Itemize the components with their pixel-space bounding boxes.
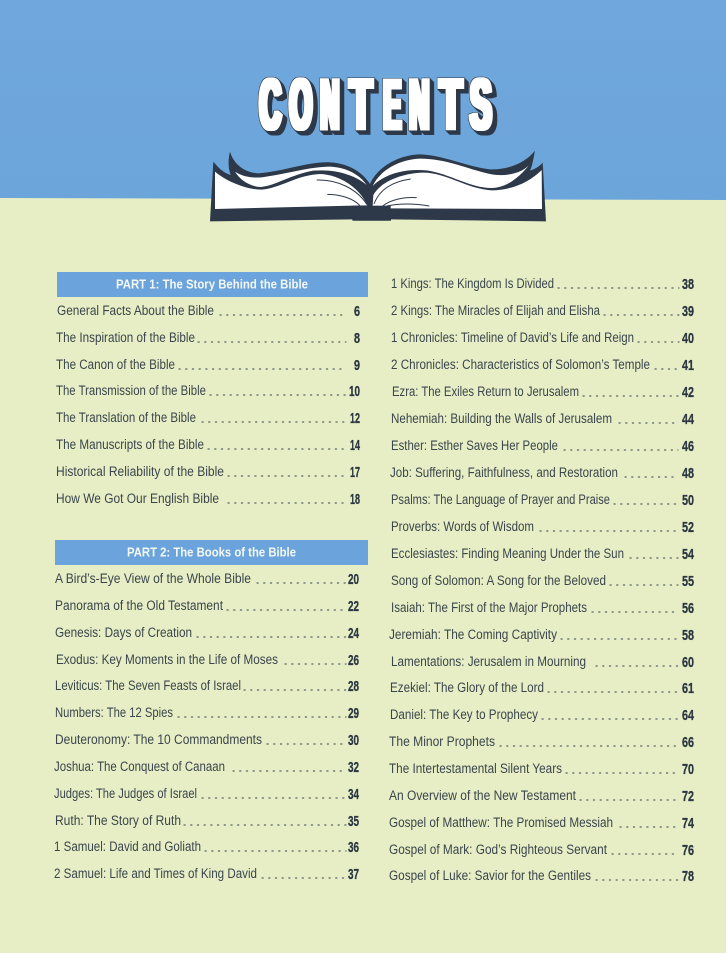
entry: new testament overview: An Overview of the New Testament: [389, 788, 576, 803]
title: N: [320, 66, 339, 145]
entry: intertestamental: The Intertestamental Silent Years: [389, 761, 562, 776]
entry: lamentations: [391, 654, 694, 671]
entry: leviticus: 28: [348, 678, 359, 695]
title: T: [440, 66, 462, 145]
entry: ruth: 35: [348, 813, 359, 830]
entry: esther: Esther: Esther Saves Her People: [391, 438, 558, 453]
entry: exodus: Exodus: Key Moments in the Life of Moses: [56, 652, 278, 667]
entry: song of solomon: 55: [682, 573, 694, 590]
entry: deuteronomy: [55, 732, 359, 749]
entry: inspiration: 8: [354, 330, 360, 347]
entry: ruth: Ruth: The Story of Ruth: [55, 813, 181, 828]
entry: 2 chronicles: 41: [682, 357, 694, 374]
entry: joshua: Joshua: The Conquest of Canaan: [54, 759, 225, 774]
entry: matthew: Gospel of Matthew: The Promised Messiah: [389, 815, 613, 830]
entry: proverbs: [391, 519, 694, 536]
icon: open book: [210, 151, 546, 221]
panel: part 2 heading: [55, 540, 368, 565]
entry: numbers: 29: [348, 705, 359, 722]
entry: ezekiel: Ezekiel: The Glory of the Lord: [390, 680, 544, 695]
entry: 2 chronicles: 2 Chronicles: Characteristics of Solomon’s Temple: [391, 357, 650, 372]
entry: canon: [56, 357, 360, 374]
entry: ezekiel: 61: [682, 680, 694, 697]
entry: daniel: 64: [682, 707, 694, 724]
entry: jeremiah: [389, 627, 694, 644]
panel: part 2 heading: PART 2: The Books of the Bible: [127, 546, 296, 560]
entry: minor prophets: [389, 734, 694, 751]
entry: deuteronomy: Deuteronomy: The 10 Commandments: [55, 732, 262, 747]
entry: historical reliability: [56, 464, 360, 481]
entry: 1 chronicles: 1 Chronicles: Timeline of David’s Life and Reign: [391, 330, 634, 345]
entry: judges: Judges: The Judges of Israel: [54, 786, 197, 801]
entry: english bible: [56, 491, 360, 508]
part 2 entries: [54, 571, 359, 883]
entry: new testament overview: 72: [682, 788, 694, 805]
entry: historical reliability: 17: [350, 464, 360, 481]
entry: 1 samuel: [54, 839, 359, 856]
entry: transmission: 10: [349, 383, 360, 400]
entry: minor prophets: 66: [682, 734, 694, 751]
entry: genesis: [55, 625, 359, 642]
panel: part 1 heading: [57, 272, 368, 297]
panel: part 1 heading: PART 1: The Story Behind the Bible: [116, 278, 308, 292]
entry: isaiah: [391, 600, 694, 617]
entry: bird's-eye view: [55, 571, 359, 588]
entry: judges: 34: [348, 786, 359, 803]
entry: general facts: General Facts About the Bible: [57, 303, 214, 318]
entry: ezra: 42: [682, 384, 694, 401]
entry: bird's-eye view: A Bird’s-Eye View of the Whole Bible: [55, 571, 251, 586]
entry: jeremiah: Jeremiah: The Coming Captivity: [389, 627, 557, 642]
entry: new testament overview: [389, 788, 694, 805]
entry: translation: [56, 410, 360, 427]
entry: proverbs: Proverbs: Words of Wisdom: [391, 519, 534, 534]
entry: judges: [54, 786, 359, 803]
entry: 1 kings: 38: [682, 276, 694, 293]
entry: nehemiah: Nehemiah: Building the Walls of Jerusalem: [391, 411, 612, 426]
entry: genesis: Genesis: Days of Creation: [55, 625, 192, 640]
entry: canon: The Canon of the Bible: [56, 357, 175, 372]
entry: manuscripts: [56, 437, 360, 454]
entry: jeremiah: 58: [682, 627, 694, 644]
entry: proverbs: 52: [682, 519, 694, 536]
entry: exodus: 26: [348, 652, 359, 669]
entry: luke: [389, 868, 694, 885]
entry: job: 48: [682, 465, 694, 482]
entry: inspiration: [56, 330, 360, 347]
entry: esther: 46: [682, 438, 694, 455]
entry: translation: 12: [350, 410, 360, 427]
entry: job: Job: Suffering, Faithfulness, and Restoration: [390, 465, 618, 480]
entry: transmission: [56, 383, 360, 400]
entry: 1 samuel: 1 Samuel: David and Goliath: [54, 839, 201, 854]
entry: panorama: Panorama of the Old Testament: [55, 598, 223, 613]
entry: general facts: 6: [354, 303, 360, 320]
entry: 2 samuel: 37: [348, 866, 359, 883]
entry: 2 samuel: [54, 866, 359, 883]
entry: general facts: [57, 303, 360, 320]
entry: mark: 76: [682, 842, 694, 859]
entry: 1 kings: [391, 276, 694, 293]
entry: ezekiel: [390, 680, 694, 697]
entry: transmission: The Transmission of the Bible: [56, 383, 206, 398]
entry: matthew: 74: [682, 815, 694, 832]
entry: psalms: Psalms: The Language of Prayer and Praise: [391, 492, 610, 507]
entry: daniel: Daniel: The Key to Prophecy: [390, 707, 538, 722]
entry: ecclesiastes: Ecclesiastes: Finding Meaning Under the Sun: [391, 546, 624, 561]
entry: 2 samuel: 2 Samuel: Life and Times of King David: [54, 866, 257, 881]
entry: 2 kings: 2 Kings: The Miracles of Elijah and Elisha: [391, 303, 600, 318]
entry: lamentations: 60: [682, 654, 694, 671]
title: E: [384, 66, 401, 145]
blue header band: [0, 0, 726, 200]
entry: 1 chronicles: 40: [682, 330, 694, 347]
entry: joshua: 32: [348, 759, 359, 776]
entry: canon: 9: [354, 357, 360, 374]
entry: leviticus: Leviticus: The Seven Feasts of Israel: [55, 678, 241, 693]
entry: 1 kings: 1 Kings: The Kingdom Is Divided: [391, 276, 554, 291]
right column entries: [389, 276, 694, 885]
entry: panorama: [55, 598, 359, 615]
entry: historical reliability: Historical Reliability of the Bible: [56, 464, 224, 479]
entry: daniel: [390, 707, 694, 724]
entry: intertestamental: [389, 761, 694, 778]
title: N: [410, 66, 429, 145]
entry: luke: Gospel of Luke: Savior for the Gentiles: [389, 868, 591, 883]
entry: numbers: [55, 705, 359, 722]
entry: ezra: [392, 384, 694, 401]
entry: inspiration: The Inspiration of the Bible: [56, 330, 195, 345]
entry: deuteronomy: 30: [348, 732, 359, 749]
entry: intertestamental: 70: [682, 761, 694, 778]
entry: luke: 78: [682, 868, 694, 885]
entry: english bible: How We Got Our English Bible: [56, 491, 219, 506]
entry: mark: Gospel of Mark: God’s Righteous Servant: [389, 842, 607, 857]
part 1 entries: [56, 303, 360, 508]
entry: ezra: Ezra: The Exiles Return to Jerusalem: [392, 384, 579, 399]
entry: ruth: [55, 813, 359, 830]
title: C: [260, 66, 281, 145]
entry: isaiah: 56: [682, 600, 694, 617]
entry: english bible: 18: [350, 491, 360, 508]
entry: nehemiah: 44: [682, 411, 694, 428]
entry: translation: The Translation of the Bible: [56, 410, 196, 425]
entry: joshua: [54, 759, 359, 776]
entry: bird's-eye view: 20: [348, 571, 359, 588]
entry: manuscripts: The Manuscripts of the Bible: [56, 437, 204, 452]
entry: minor prophets: The Minor Prophets: [389, 734, 495, 749]
entry: numbers: Numbers: The 12 Spies: [55, 705, 173, 720]
text: S: [470, 66, 492, 145]
entry: genesis: 24: [348, 625, 359, 642]
title: T: [350, 66, 372, 145]
entry: leviticus: [55, 678, 359, 695]
entry: lamentations: Lamentations: Jerusalem in Mourning: [391, 654, 586, 669]
entry: song of solomon: Song of Solomon: A Song for the Beloved: [391, 573, 606, 588]
entry: 1 samuel: 36: [348, 839, 359, 856]
entry: psalms: 50: [682, 492, 694, 509]
entry: 2 kings: 39: [682, 303, 694, 320]
entry: isaiah: Isaiah: The First of the Major Prophets: [391, 600, 587, 615]
entry: esther: [391, 438, 694, 455]
entry: panorama: 22: [348, 598, 359, 615]
title: O: [290, 66, 312, 145]
entry: manuscripts: 14: [350, 437, 360, 454]
entry: ecclesiastes: 54: [682, 546, 694, 563]
title: [260, 66, 492, 145]
